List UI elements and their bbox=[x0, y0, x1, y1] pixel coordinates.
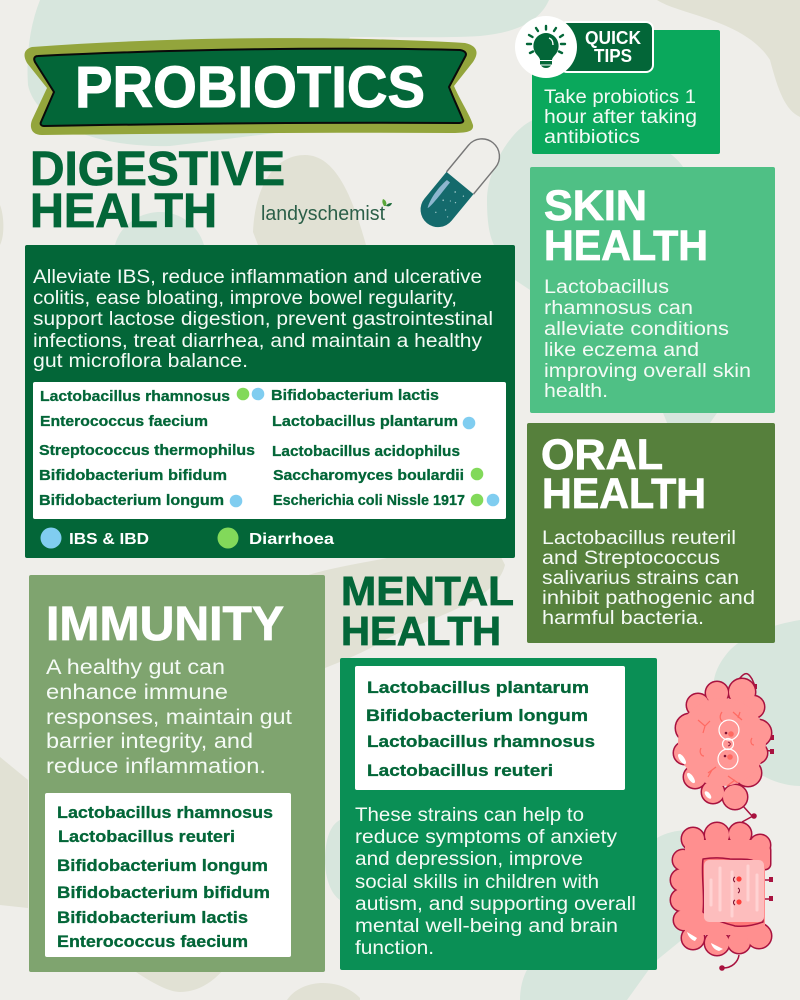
immunity strain list: Bifidobacterium bifidum bbox=[57, 883, 270, 902]
heading: mental health: MENTAL bbox=[341, 568, 514, 614]
panel: digestive health bbox=[25, 245, 515, 558]
heading: skin health: HEALTH bbox=[544, 222, 708, 270]
oral text: and Streptococcus bbox=[542, 548, 720, 569]
digestive description: gut microflora balance. bbox=[33, 351, 248, 372]
immunity strain list: Lactobacillus rhamnosus bbox=[57, 803, 273, 822]
mental strain list: Lactobacillus plantarum bbox=[367, 678, 589, 697]
icon: capsule bbox=[413, 132, 507, 234]
digestive description: infections, treat diarrhea, and maintain a healthy bbox=[33, 331, 483, 352]
immunity text: enhance immune bbox=[46, 681, 228, 704]
strain list: Lactobacillus rhamnosus bbox=[40, 388, 230, 405]
heading: skin health: SKIN bbox=[544, 182, 647, 230]
mental strain list: Bifidobacterium longum bbox=[366, 706, 588, 725]
mental strain list: Lactobacillus rhamnosus bbox=[367, 732, 595, 751]
skin text: like eczema and bbox=[544, 340, 699, 361]
mental text: reduce symptoms of anxiety bbox=[355, 827, 618, 848]
immunity text: barrier integrity, and bbox=[46, 730, 253, 753]
panel: oral health bbox=[527, 423, 775, 643]
badge: quick tips bbox=[560, 22, 653, 72]
skin text bbox=[544, 277, 751, 402]
immunity strain list: Lactobacillus reuteri bbox=[58, 827, 235, 846]
highlights on intestine bbox=[677, 753, 713, 800]
oral text bbox=[542, 528, 755, 629]
mental text bbox=[355, 805, 636, 959]
strain list: Escherichia coli Nissle 1917 bbox=[273, 492, 465, 509]
strain list: Bifidobacterium longum bbox=[39, 492, 224, 509]
immunity strain list bbox=[45, 793, 291, 957]
heading: digestive health: HEALTH bbox=[30, 185, 217, 238]
immunity strain list: Enterococcus faecium bbox=[57, 932, 248, 951]
skin text: improving overall skin bbox=[544, 361, 751, 382]
mental text: These strains can help to bbox=[355, 805, 584, 826]
strain list: Bifidobacterium bifidum bbox=[39, 467, 227, 484]
strain list: Saccharomyces boulardii bbox=[273, 467, 464, 484]
heading: oral health bbox=[541, 431, 706, 518]
mental text: function. bbox=[355, 938, 434, 959]
mental text: and depression, improve bbox=[355, 849, 583, 870]
oral text: Lactobacillus reuteril bbox=[542, 528, 736, 549]
digestive description bbox=[33, 267, 493, 372]
strain list: Bifidobacterium lactis bbox=[271, 387, 439, 404]
mental text: autism, and supporting overall bbox=[355, 894, 636, 915]
strain list: Enterococcus faecium bbox=[40, 413, 208, 430]
skin text: Lactobacillus bbox=[544, 277, 669, 298]
mental text: social skills in children with bbox=[355, 872, 599, 893]
logo: landyschemist: landyschemist bbox=[261, 203, 385, 225]
skin text: alleviate conditions bbox=[544, 319, 729, 340]
strain list bbox=[33, 382, 506, 519]
digestive description: support lactose digestion, prevent gastrointestinal bbox=[33, 309, 493, 330]
oral text: salivarius strains can bbox=[542, 568, 739, 589]
skin text: health. bbox=[544, 381, 608, 402]
quick tip text: antibiotics bbox=[544, 127, 640, 148]
digestive description: Alleviate IBS, reduce inflammation and ulcerative bbox=[33, 267, 482, 288]
immunity text bbox=[46, 656, 292, 778]
skin text: rhamnosus can bbox=[544, 298, 693, 319]
immunity text: responses, maintain gut bbox=[46, 706, 292, 729]
heading: oral health: ORAL bbox=[541, 431, 663, 479]
heading: skin health bbox=[544, 182, 708, 270]
oral text: inhibit pathogenic and bbox=[542, 588, 755, 609]
digestive description: colitis, ease bloating, improve bowel regularity, bbox=[33, 288, 457, 309]
immunity strain list: Bifidobacterium lactis bbox=[57, 908, 248, 927]
title banner bbox=[25, 38, 477, 135]
panel: immunity bbox=[29, 575, 325, 972]
heading: mental health bbox=[341, 568, 514, 654]
heading: digestive health: DIGESTIVE bbox=[30, 143, 285, 196]
immunity text: A healthy gut can bbox=[46, 656, 225, 679]
oral text: harmful bacteria. bbox=[542, 608, 704, 629]
mental text: mental well-being and brain bbox=[355, 916, 618, 937]
icon: light bulb bbox=[515, 16, 577, 78]
quick tip text: hour after taking bbox=[544, 107, 697, 128]
icon: large intestine bbox=[671, 816, 773, 971]
heading: oral health: HEALTH bbox=[542, 470, 706, 518]
panel: skin health bbox=[530, 167, 775, 413]
heading: mental health: HEALTH bbox=[341, 608, 501, 654]
mental strain list: Lactobacillus reuteri bbox=[367, 761, 553, 780]
badge: quick tips: TIPS bbox=[594, 46, 632, 66]
quick tip text: Take probiotics 1 bbox=[544, 87, 696, 108]
legend: IBS & IBD bbox=[69, 531, 149, 548]
icon: small intestine bbox=[674, 674, 774, 819]
strain list: Lactobacillus acidophilus bbox=[272, 443, 460, 460]
strain list: Lactobacillus plantarum bbox=[272, 413, 458, 430]
badge: quick tips: QUICK bbox=[585, 28, 641, 48]
strain list: Streptococcus thermophilus bbox=[39, 442, 255, 459]
panel: quick tips bbox=[515, 16, 720, 154]
panel: mental health bbox=[340, 658, 657, 970]
immunity text: reduce inflammation. bbox=[46, 755, 266, 778]
heading: immunity: IMMUNITY bbox=[46, 598, 284, 651]
immunity strain list: Bifidobacterium longum bbox=[57, 856, 268, 875]
legend bbox=[40, 528, 334, 548]
mental strain list bbox=[355, 666, 625, 790]
legend: Diarrhoea bbox=[249, 531, 334, 548]
heading: digestive health bbox=[30, 143, 285, 238]
quick tip text bbox=[544, 87, 697, 148]
title text: PROBIOTICS bbox=[75, 55, 425, 120]
